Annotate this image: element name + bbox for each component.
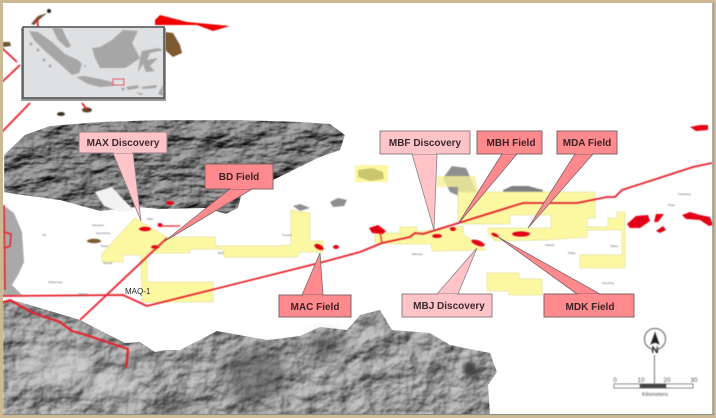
label: MDK Field: MDK Field <box>566 302 614 313</box>
label: MBJ Discovery: MBJ Discovery <box>413 301 485 312</box>
small location labels: Tonduk <box>282 233 292 237</box>
yellow block: western area <box>102 210 323 302</box>
label: MAC Field <box>279 253 351 317</box>
small location labels: Sailus <box>610 244 619 248</box>
southern landmass relief <box>3 300 497 416</box>
label: BD Field <box>165 164 273 241</box>
label: MBJ Discovery <box>402 248 492 317</box>
inset locator box <box>113 79 124 85</box>
scale bar: 30 <box>690 377 698 384</box>
small location labels: Raas <box>101 244 109 248</box>
small location labels <box>42 192 691 296</box>
small location labels: Ketapang <box>678 192 691 196</box>
gas fields <box>139 15 713 251</box>
label: BD Field: BD Field <box>219 172 259 183</box>
small location labels: Sepanjang <box>96 231 111 235</box>
label: MAX Discovery <box>79 132 167 221</box>
label: MAC Field: MAC Field <box>291 302 339 313</box>
place label: MAQ-1: MAQ-1 <box>125 287 151 296</box>
brown islands <box>3 9 182 243</box>
scale bar: 0 <box>613 377 617 384</box>
label: MDA Field <box>528 131 617 228</box>
small location labels: Paliat <box>568 251 576 255</box>
label: MBH Field: MBH Field <box>487 138 535 149</box>
western landmass <box>3 205 24 296</box>
small location labels: Sakala <box>545 243 555 247</box>
small location labels: Kangean <box>92 223 104 227</box>
label: MBF Discovery <box>380 131 470 230</box>
label: MBH Field <box>458 131 542 224</box>
small location labels: Giligenting <box>48 280 63 284</box>
small location labels: Raas <box>668 203 676 207</box>
small location labels: Kambing <box>602 281 614 285</box>
scale bar: 10 <box>637 377 645 384</box>
yellow block: eastern area <box>355 165 625 295</box>
label: MDK Field <box>498 237 634 317</box>
north arrow <box>644 328 666 384</box>
small location labels: Bawean <box>412 252 423 256</box>
label: MAX Discovery: MAX Discovery <box>87 138 160 149</box>
yellow block: central area <box>375 226 486 251</box>
scale bar: Kilometers <box>642 392 668 398</box>
small location labels: Talango <box>78 292 89 296</box>
northern landmass relief <box>4 120 345 214</box>
scale bar <box>613 377 698 398</box>
inset locator map <box>21 27 166 101</box>
small location labels: MBX <box>147 217 154 221</box>
small islands <box>293 166 543 211</box>
scale bar: 20 <box>663 377 671 384</box>
label: MDA Field: MDA Field <box>563 138 611 149</box>
north arrow: N <box>651 345 659 356</box>
small location labels: BDX <box>218 251 224 255</box>
small location labels: Sapudi <box>103 261 113 265</box>
small location labels: Gili <box>42 233 47 237</box>
label: MBF Discovery: MBF Discovery <box>389 138 462 149</box>
